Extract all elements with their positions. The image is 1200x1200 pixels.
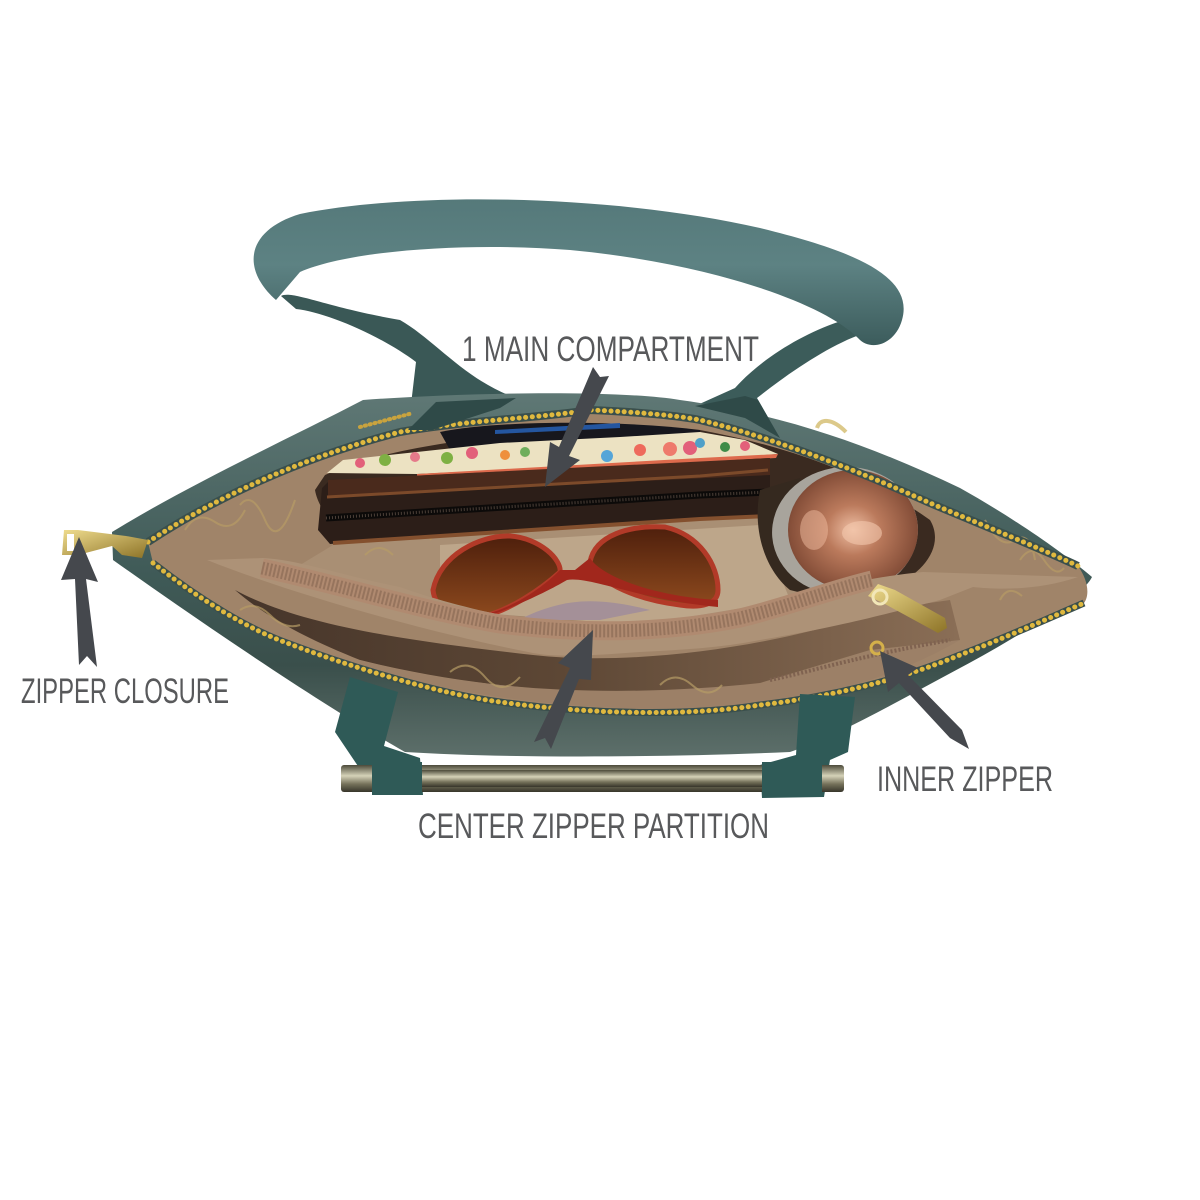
sunglasses backdrop lining [300,515,870,622]
rear handle tabs [408,396,780,438]
brown wallet [318,458,770,544]
red sunglasses [433,527,718,620]
dark upper compartment [315,429,935,590]
floral notebook [327,423,778,476]
main zipper pull [62,530,148,558]
copper bottle [758,461,923,601]
gold ring [817,421,846,432]
rear short zipper [360,413,413,427]
lining pattern [185,500,1064,692]
label: zipper closure: ZIPPER CLOSURE [21,672,229,711]
bag body [112,393,1092,756]
front metal bar handle [341,762,844,797]
arrow: zipper closure [61,537,98,667]
arrow: center zipper partition [534,630,593,749]
handbag illustration [62,199,1092,798]
main zipper [148,410,1084,713]
inner zipper pull [871,642,883,654]
center zipper partition [207,558,1078,656]
zipper pull tag [868,584,947,633]
arrow: inner zipper [880,651,969,749]
front pocket dark lining [235,590,960,694]
label: 1 main compartment: 1 MAIN COMPARTMENT [462,330,759,369]
arrow: main compartment [545,367,609,487]
bag lining [148,410,1087,713]
front handle tabs [335,677,855,798]
label: inner zipper: INNER ZIPPER [877,760,1053,799]
rear handle [254,199,904,438]
label: center zipper partition: CENTER ZIPPER PARTITION [418,807,769,846]
